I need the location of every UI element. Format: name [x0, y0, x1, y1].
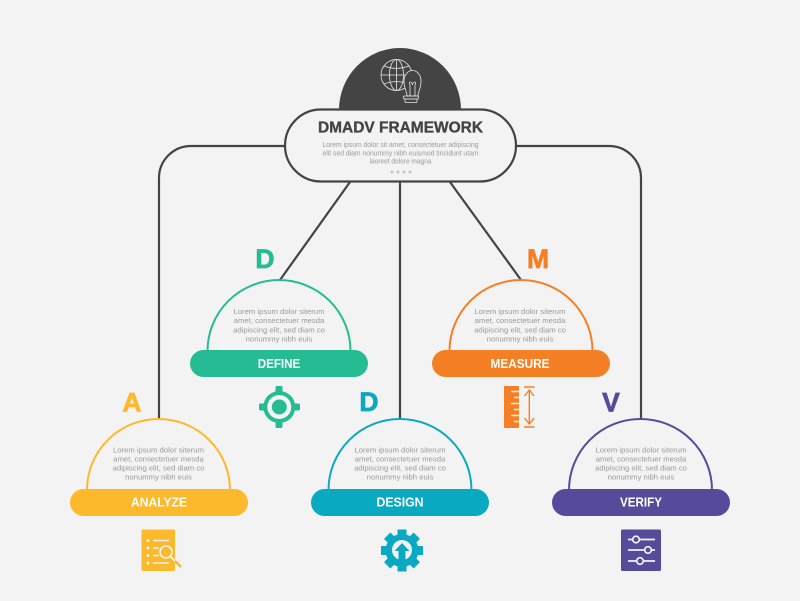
- description: adipiscing elit, sed diam co: [354, 463, 446, 472]
- description: amet, consectetuer mesda: [475, 316, 566, 325]
- panel: analyze: ANALYZE: [131, 496, 187, 510]
- label bar: [190, 350, 368, 377]
- description: Lorem ipsum dolor siterum: [354, 445, 446, 454]
- description: nonummy nibh euis: [608, 472, 674, 481]
- header description: laoreet dolore magna: [370, 156, 432, 166]
- description: adipiscing elit, sed diam co: [595, 463, 687, 472]
- description: [595, 445, 687, 481]
- icon: sliders: [621, 530, 661, 571]
- title: DMADV FRAMEWORK: [318, 120, 484, 136]
- header box: DMADV framework: [285, 110, 516, 182]
- description: Lorem ipsum dolor siterum: [595, 445, 687, 454]
- header description: [322, 140, 478, 166]
- panel: design: [311, 387, 489, 572]
- description: [113, 445, 205, 481]
- label bar: [552, 489, 730, 516]
- dome: [87, 419, 230, 490]
- dome: [569, 419, 712, 490]
- header description: Lorem ipsum dolor sit amet, consectetuer adipiscing: [322, 140, 478, 149]
- letter D: D: [359, 387, 379, 417]
- description: [354, 445, 446, 481]
- icon: gear with up arrow: [381, 530, 423, 572]
- description: amet, consectetuer mesda: [355, 454, 446, 463]
- icon: ruler and arrow: [504, 386, 534, 428]
- header dark semicircle: [339, 48, 461, 110]
- pagination dots: [390, 170, 412, 174]
- icon: globe and light bulb: [381, 60, 421, 102]
- letter D: D: [255, 244, 275, 274]
- description: [233, 307, 325, 343]
- panel: verify: VERIFY: [620, 496, 663, 510]
- panel: verify: [552, 388, 730, 571]
- description: adipiscing elit, sed diam co: [233, 325, 325, 334]
- description: [474, 307, 566, 343]
- description: amet, consectetuer mesda: [113, 454, 205, 463]
- connector lines: [159, 146, 641, 420]
- panel: measure: MEASURE: [490, 357, 550, 371]
- panel: measure: [432, 244, 610, 428]
- description: Lorem ipsum dolor siterum: [113, 445, 204, 454]
- panel: analyze: [70, 388, 248, 571]
- description: nonummy nibh euis: [125, 472, 192, 481]
- dome: [328, 419, 472, 490]
- description: adipiscing elit, sed diam co: [474, 325, 566, 334]
- icon: document with magnifier: [142, 530, 181, 571]
- dome: [450, 280, 592, 351]
- panel: define: DEFINE: [258, 357, 300, 371]
- header description: elit sed diam nonummy nibh euismod tincidunt utam: [322, 148, 478, 158]
- label bar: [311, 489, 489, 516]
- description: nonummy nibh euis: [246, 334, 312, 343]
- description: amet, consectetuer mesda: [596, 454, 687, 463]
- letter A: A: [122, 388, 142, 418]
- description: nonummy nibh euis: [487, 334, 553, 343]
- description: amet, consectetuer mesda: [234, 316, 325, 325]
- description: Lorem ipsum dolor siterum: [474, 307, 566, 316]
- label bar: [432, 350, 610, 377]
- dome: [208, 280, 350, 351]
- label bar: [70, 489, 248, 516]
- description: nonummy nibh euis: [367, 472, 433, 481]
- description: adipiscing elit, sed diam co: [113, 463, 204, 472]
- letter V: V: [602, 388, 620, 418]
- panel: design: DESIGN: [376, 496, 424, 510]
- letter M: M: [527, 244, 549, 274]
- description: Lorem ipsum dolor siterum: [233, 307, 325, 316]
- panel: define: [190, 244, 368, 428]
- icon: target: [259, 386, 300, 428]
